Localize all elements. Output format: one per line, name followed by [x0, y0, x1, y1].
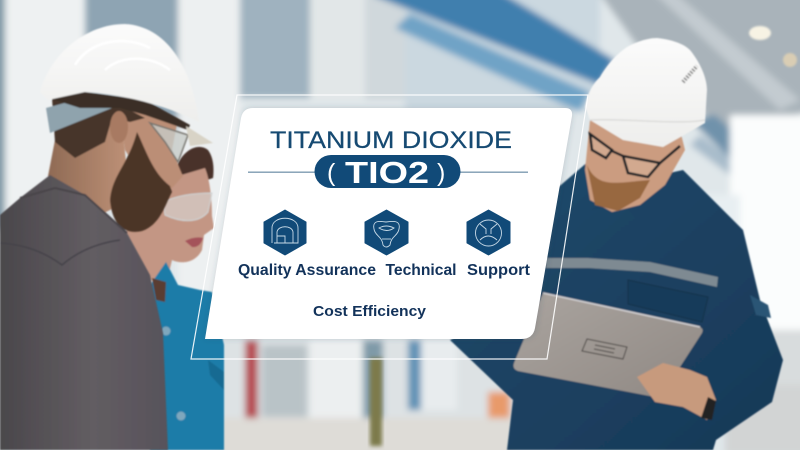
hand [637, 363, 716, 420]
man grey shirt [0, 175, 168, 450]
face [585, 120, 685, 212]
helmet strap [46, 96, 118, 133]
woman dark undershirt [152, 278, 166, 302]
icon: quality assurance [264, 210, 306, 255]
person: man in navy jacket with tablet [450, 38, 783, 450]
shirt seam [0, 240, 120, 265]
under-brim shadow [52, 92, 190, 130]
woman hair [175, 147, 213, 186]
icon: support [467, 210, 510, 255]
brim tip [186, 126, 213, 146]
shirt button upper [162, 326, 170, 336]
label: support: Support [467, 262, 530, 279]
shirt button lower [176, 412, 186, 420]
beard [587, 165, 650, 211]
person: woman in blue shirt [125, 147, 224, 450]
label: technical: Technical [386, 262, 456, 279]
navy jacket [450, 160, 783, 450]
collar shadow [20, 188, 127, 233]
yellow safety post [370, 358, 382, 446]
label: quality assurance: Quality Assurance [238, 262, 376, 279]
chest pocket [628, 280, 708, 322]
hat brim line [590, 120, 705, 122]
woman neck and face [125, 168, 214, 285]
white helmet [40, 24, 199, 122]
formula pill: ( [327, 159, 336, 187]
man neck [48, 105, 130, 215]
man hair [52, 98, 145, 158]
tablet [514, 293, 703, 398]
label: cost efficiency: Cost Efficiency [313, 303, 427, 320]
formula pill: ) [437, 159, 445, 187]
person: bearded man in grey shirt [0, 24, 213, 450]
man safety glasses [150, 123, 188, 162]
ceiling lights [749, 26, 797, 67]
formula pill: TIO2 [345, 155, 429, 190]
shirt pocket flap [208, 360, 224, 390]
card body [205, 108, 572, 339]
icon: technical [365, 210, 408, 255]
woman lips [185, 237, 203, 247]
reflective stripe [546, 258, 718, 287]
heading: TITANIUM DIOXIDE [270, 127, 512, 154]
collar [590, 170, 683, 230]
white information card [205, 108, 572, 339]
woman blue shirt [150, 262, 224, 450]
watch [701, 397, 716, 420]
tablet logo [582, 339, 627, 359]
glasses [590, 134, 680, 177]
white hard hat [585, 38, 707, 147]
woman safety glasses [163, 193, 212, 221]
card shadow [205, 108, 572, 339]
divider line [248, 172, 528, 173]
tablet edge highlight [543, 293, 700, 327]
man beard [110, 132, 172, 232]
man face [118, 100, 183, 190]
formula pill [314, 155, 460, 190]
sleeve tab [750, 295, 771, 318]
helmet ridges [75, 41, 170, 70]
hat vents [683, 66, 697, 82]
man ear [110, 111, 128, 143]
glass outline frame [191, 95, 588, 359]
